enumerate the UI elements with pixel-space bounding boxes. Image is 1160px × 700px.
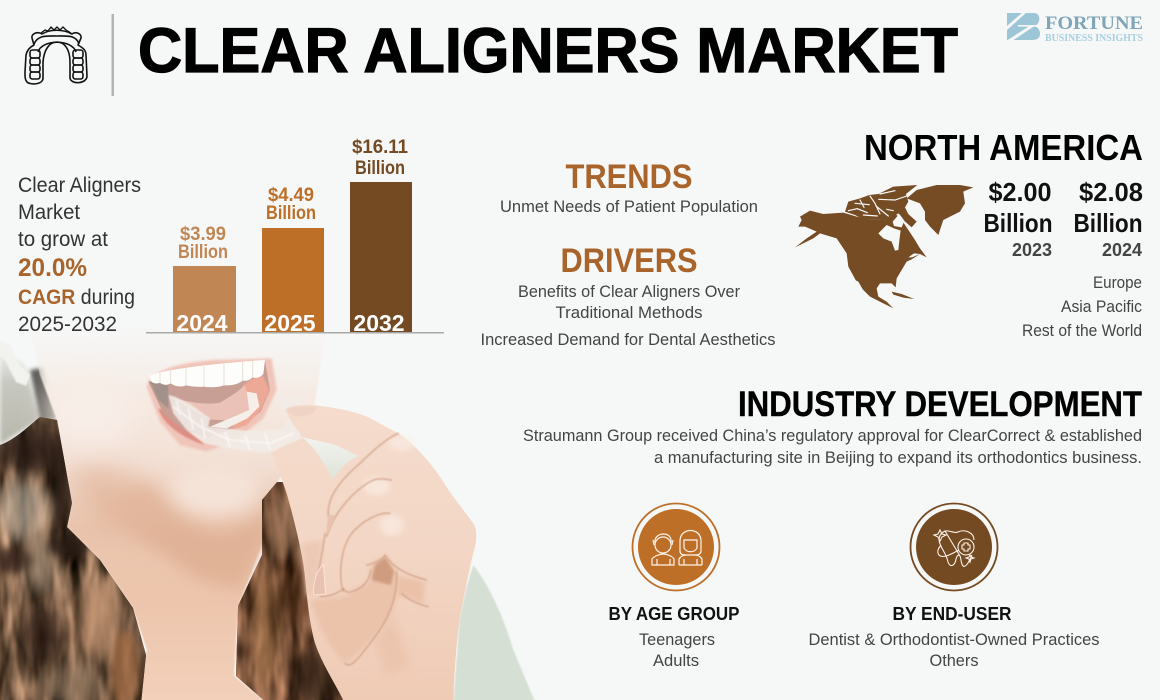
bar 2024 xyxy=(173,224,236,336)
earring xyxy=(0,340,30,386)
logo: Fortune Business Insights: BUSINESS INSIGHTS xyxy=(1045,33,1143,44)
industry development: Straumann Group received China’s regulatory approval for ClearCorrect & established xyxy=(523,426,1142,445)
photo: woman holding clear aligner xyxy=(0,318,535,700)
value 2024: 2024 xyxy=(1102,240,1142,260)
title: CLEAR ALIGNERS MARKET xyxy=(138,16,958,86)
growth text: CAGR during xyxy=(18,286,135,309)
shadow under jaw xyxy=(100,482,282,590)
growth text: 20.0% xyxy=(18,254,87,282)
growth text: Clear Aligners xyxy=(18,174,141,197)
Arctic islands xyxy=(845,185,917,227)
value 2023: 2023 xyxy=(1012,240,1052,260)
Gulf of California xyxy=(855,280,864,292)
drivers: DRIVERS xyxy=(560,242,698,280)
logo: Fortune Business Insights xyxy=(1006,12,1143,44)
sweater xyxy=(453,565,535,700)
trends: TRENDS xyxy=(566,158,692,196)
bar 2032 xyxy=(350,137,412,336)
skin: face and neck xyxy=(28,318,332,700)
other regions xyxy=(1022,273,1142,340)
hair right xyxy=(236,482,343,700)
Greenland xyxy=(907,185,973,235)
map: North America xyxy=(795,185,973,308)
hair left xyxy=(0,410,150,700)
bar 2032: Billion xyxy=(355,158,405,179)
value 2024: $2.08 xyxy=(1079,177,1143,207)
bar chart xyxy=(146,137,444,336)
other regions: Rest of the World xyxy=(1022,321,1142,340)
age group text: Adults xyxy=(653,651,699,670)
age group text: Teenagers xyxy=(639,630,715,649)
hand xyxy=(272,405,476,700)
icon: age group xyxy=(632,504,720,590)
age group text xyxy=(608,603,740,670)
icon: end user xyxy=(910,504,998,590)
icon: dental arch aligner xyxy=(25,27,87,84)
other regions: Asia Pacific xyxy=(1061,297,1142,316)
bar 2025: Billion xyxy=(266,203,316,224)
bar 2024: Billion xyxy=(178,242,228,263)
drivers xyxy=(480,242,776,349)
value 2023: Billion xyxy=(984,208,1052,238)
industry development: a manufacturing site in Beijing to expand its orthodontics business. xyxy=(654,448,1142,467)
bar 2025: 2025 xyxy=(264,310,316,336)
lips xyxy=(147,358,277,452)
region heading: NORTH AMERICA xyxy=(864,127,1143,168)
growth text: 2025-2032 xyxy=(18,313,117,336)
finger contours xyxy=(314,433,428,665)
fingernail xyxy=(313,565,326,595)
thumb shade xyxy=(302,540,323,597)
tongue xyxy=(170,385,251,421)
value 2023 xyxy=(984,177,1052,260)
drivers: Increased Demand for Dental Aesthetics xyxy=(480,330,776,349)
bar 2032: $16.11 xyxy=(352,137,408,158)
growth text: to grow at xyxy=(18,228,108,251)
other regions: Europe xyxy=(1093,273,1142,292)
side shadow of hand xyxy=(375,613,410,677)
drivers: Benefits of Clear Aligners Over xyxy=(518,282,740,301)
Hudson Bay xyxy=(878,225,901,251)
bar 2032: 2032 xyxy=(353,310,405,336)
logo: Fortune Business Insights: FORTUNE xyxy=(1045,13,1143,34)
inner mouth xyxy=(148,361,270,437)
knuckle highlights xyxy=(380,514,404,536)
industry development xyxy=(523,385,1142,467)
growth text xyxy=(18,174,141,336)
bar 2025 xyxy=(262,185,324,336)
aligner xyxy=(168,395,303,453)
growth text: Market xyxy=(18,201,80,224)
end user text: BY END-USER xyxy=(892,603,1012,624)
Cuba xyxy=(892,292,914,299)
gap between fingers xyxy=(303,437,358,479)
end user text: Dentist & Orthodontist-Owned Practices xyxy=(808,630,1100,649)
chin highlight xyxy=(173,462,257,514)
trends: Unmet Needs of Patient Population xyxy=(500,197,758,216)
trends xyxy=(500,158,758,216)
value 2024: Billion xyxy=(1074,208,1142,238)
drivers: Traditional Methods xyxy=(556,303,702,322)
bar 2024: 2024 xyxy=(176,310,228,336)
grey wall behind ear xyxy=(0,350,40,445)
end user text xyxy=(808,603,1100,670)
value 2023: $2.00 xyxy=(988,177,1052,207)
bar 2024: $3.99 xyxy=(180,224,226,245)
bar 2025: $4.49 xyxy=(268,185,314,206)
upper teeth xyxy=(149,360,265,387)
age group text: BY AGE GROUP xyxy=(608,603,740,624)
end user text: Others xyxy=(930,651,978,670)
Gulf of St Lawrence xyxy=(908,253,920,257)
value 2024 xyxy=(1074,177,1143,260)
palm shading xyxy=(310,555,397,663)
lower teeth xyxy=(210,392,259,428)
mouth xyxy=(147,358,303,453)
